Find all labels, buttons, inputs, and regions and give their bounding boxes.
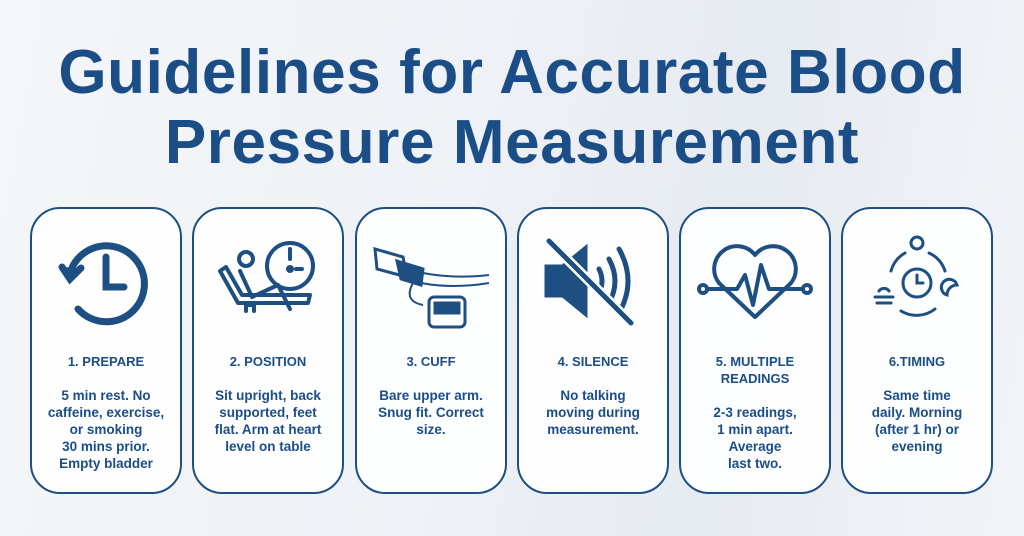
text: caffeine, exercise, bbox=[48, 405, 164, 420]
panel: position bbox=[192, 207, 344, 494]
text: flat. Arm at heart bbox=[215, 422, 321, 437]
text: Average bbox=[729, 439, 781, 454]
icon: clock rewind bbox=[58, 242, 148, 326]
text: last two. bbox=[728, 456, 782, 471]
panel: timing bbox=[841, 207, 993, 494]
icon: clock cycle bbox=[874, 236, 959, 317]
text: evening bbox=[891, 439, 942, 454]
panel: silence bbox=[517, 207, 669, 494]
heading bbox=[716, 354, 794, 386]
text: or smoking bbox=[70, 422, 142, 437]
text: 1 min apart. bbox=[717, 422, 793, 437]
heading: 6.TIMING bbox=[889, 354, 945, 369]
text bbox=[872, 388, 962, 454]
title: Pressure Measurement bbox=[165, 108, 859, 177]
title bbox=[58, 38, 966, 177]
text: Empty bladder bbox=[59, 456, 153, 471]
heading: 2. POSITION bbox=[230, 354, 306, 369]
heading: READINGS bbox=[721, 371, 789, 386]
heading: 1. PREPARE bbox=[68, 354, 144, 369]
icon: cuff and monitor bbox=[373, 247, 489, 328]
text: size. bbox=[416, 422, 446, 437]
text: daily. Morning bbox=[872, 405, 962, 420]
heading: 4. SILENCE bbox=[558, 354, 628, 369]
text: Sit upright, back bbox=[215, 388, 321, 403]
text: No talking bbox=[560, 388, 626, 403]
icon: seated person with clock bbox=[218, 241, 315, 313]
text bbox=[48, 388, 164, 471]
heading: 3. CUFF bbox=[406, 354, 456, 369]
text: (after 1 hr) or bbox=[875, 422, 959, 437]
heading: 5. MULTIPLE bbox=[716, 354, 794, 369]
panel: prepare bbox=[30, 207, 182, 494]
text bbox=[546, 388, 640, 437]
text: Bare upper arm. bbox=[379, 388, 483, 403]
text bbox=[214, 388, 322, 454]
text: 2-3 readings, bbox=[713, 405, 797, 420]
text bbox=[378, 388, 484, 437]
panel: multiple readings bbox=[679, 207, 831, 494]
text: moving during bbox=[546, 405, 640, 420]
text: Same time bbox=[883, 388, 951, 403]
text: 5 min rest. No bbox=[61, 388, 151, 403]
title: Guidelines for Accurate Blood bbox=[58, 38, 966, 107]
icon: muted speaker bbox=[544, 238, 634, 326]
text: 30 mins prior. bbox=[62, 439, 150, 454]
text bbox=[713, 405, 797, 471]
text: level on table bbox=[225, 439, 311, 454]
text: Snug fit. Correct bbox=[378, 405, 484, 420]
text: supported, feet bbox=[219, 405, 317, 420]
text: measurement. bbox=[547, 422, 639, 437]
panel: cuff bbox=[355, 207, 507, 494]
icon: heart with pulse bbox=[697, 244, 813, 320]
